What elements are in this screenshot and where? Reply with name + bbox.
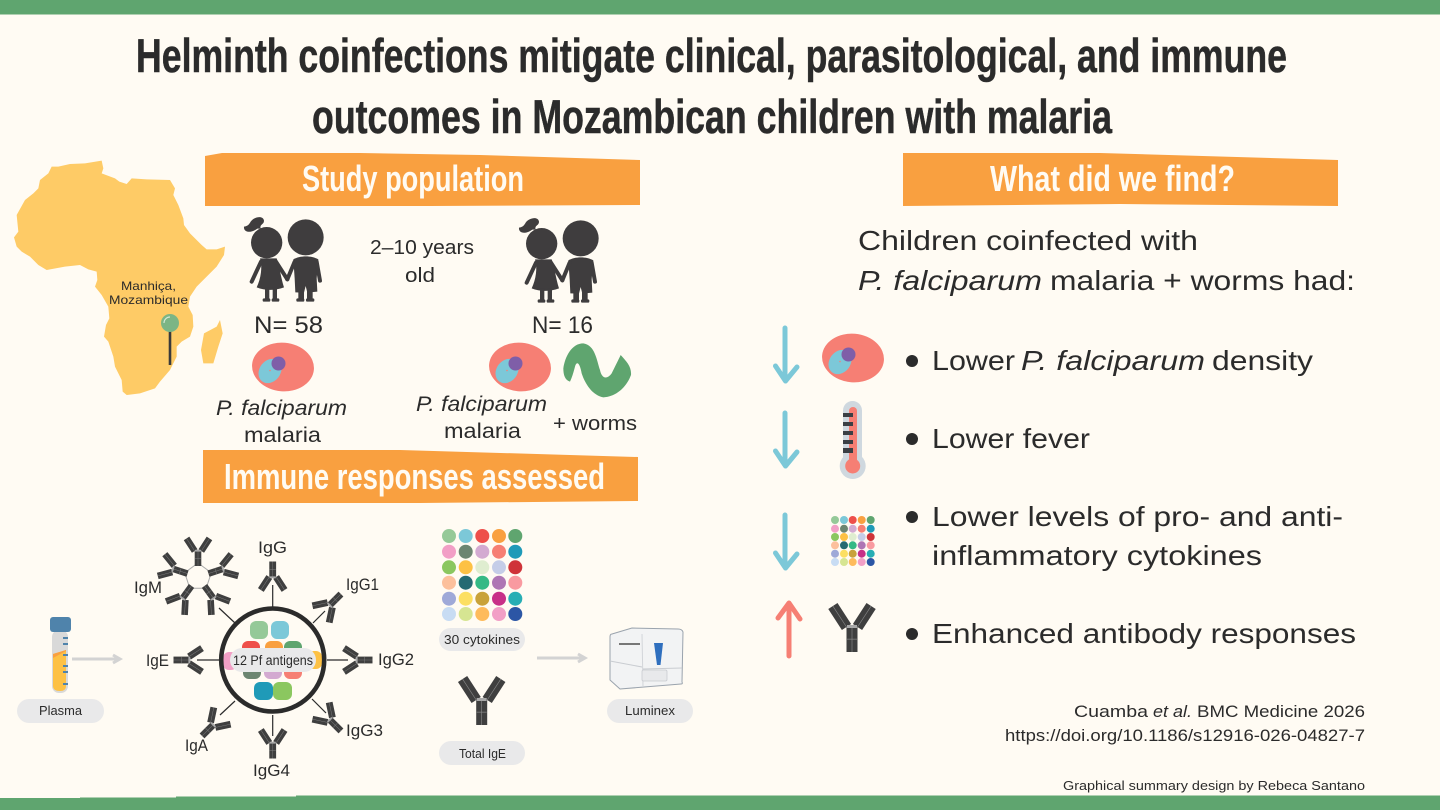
banner: what did we find: What did we find?: [990, 158, 1235, 199]
pill: Luminex: [607, 699, 693, 723]
citation: BMC Medicine 2026: [1197, 702, 1365, 721]
findings intro text: Children coinfected with: [858, 225, 1198, 256]
finding: enhanced antibody responses: Enhanced antibody responses: [932, 618, 1356, 649]
sample size: malaria group: N= 58: [254, 312, 323, 339]
arrow: down: [776, 515, 797, 568]
icon: thermometer: [840, 401, 866, 479]
finding: lower cytokines: inflammatory cytokines: [932, 540, 1262, 571]
banner: study population: Study population: [302, 158, 524, 199]
citation: Cuamba: [1074, 702, 1149, 721]
label: coinfected group: + worms: [553, 413, 637, 435]
icon: Luminex instrument: [610, 628, 683, 689]
design credit: Graphical summary design by Rebeca Santano: [1063, 778, 1365, 793]
title: [136, 29, 1287, 143]
age range text: 2–10 years: [370, 237, 474, 259]
bottom green bar: [0, 796, 1440, 810]
map of Africa with location pin: Manhiça,: [121, 279, 176, 293]
finding: enhanced antibody responses: [778, 603, 1356, 656]
pill: plasma: Plasma: [39, 703, 83, 718]
citation: https://doi.org/10.1186/s12916-026-04827-7: [1005, 726, 1365, 745]
finding: lower parasite density: [776, 328, 1313, 385]
map of Africa with location pin: [14, 161, 225, 395]
findings intro text: malaria + worms had:: [1050, 265, 1355, 296]
isotype labels: IgG2: [378, 650, 414, 669]
icon: infected red cell, group 2: [487, 340, 553, 394]
finding: lower parasite density: Lower: [932, 345, 1015, 376]
findings intro text: [858, 225, 1355, 296]
IgM pentamer: [155, 537, 241, 618]
arrow: down: [776, 413, 797, 466]
pill: plasma: [17, 699, 104, 723]
arrow: down: [776, 328, 797, 381]
sample size: coinfected group: N= 16: [532, 312, 593, 339]
icon: infected red cell, group 1: [250, 340, 316, 394]
isotype labels: IgG3: [346, 721, 383, 740]
finding: lower cytokines: [776, 501, 1343, 571]
findings intro text: P. falciparum: [858, 265, 1042, 296]
finding: lower parasite density: P. falciparum: [1021, 345, 1205, 376]
finding: lower fever: [776, 401, 1090, 479]
antibody isotypes: [174, 562, 372, 758]
isotype labels: IgE: [146, 651, 169, 670]
icon: plasma tube: [50, 617, 71, 693]
citation: [1005, 702, 1365, 745]
pill: total IgE: [439, 741, 525, 765]
isotype labels: [134, 538, 414, 780]
isotype labels: IgG1: [346, 575, 379, 594]
icon: total IgE antibody: [458, 676, 505, 725]
pill: Luminex: Luminex: [625, 703, 676, 718]
label: malaria group: malaria: [244, 424, 321, 447]
arrow: assay to Luminex: [537, 654, 585, 662]
title: outcomes in Mozambican children with malaria: [312, 90, 1113, 143]
cytokine colour grid: [442, 529, 522, 621]
pill: 30 cytokines: 30 cytokines: [444, 632, 521, 647]
icon: antibody: [828, 603, 876, 652]
isotype labels: IgG: [258, 538, 287, 557]
isotype labels: IgG4: [253, 761, 290, 780]
banner: immune responses assessed: [203, 450, 638, 503]
finding: lower cytokines: Lower levels of pro- and anti-: [932, 501, 1343, 532]
isotype labels: IgA: [185, 736, 209, 755]
pill: 12 Pf antigens: 12 Pf antigens: [233, 653, 313, 668]
icon: worm: [563, 343, 631, 397]
icon: children group 2: [519, 218, 599, 303]
label: coinfected group: malaria: [444, 420, 521, 443]
icon: children group 1: [244, 217, 324, 302]
age range text: [370, 237, 474, 287]
antigen blobs: [223, 621, 322, 700]
pill: total IgE: Total IgE: [459, 746, 506, 761]
banner: study population: [205, 153, 640, 206]
icon: infected red cell: [820, 331, 886, 385]
banner: what did we find: [903, 153, 1338, 206]
label: malaria group: [216, 397, 347, 447]
label: coinfected group: P. falciparum: [416, 393, 547, 416]
top green bar: [0, 0, 1440, 14]
icon: small cytokine grid: [831, 516, 875, 566]
finding: lower parasite density: density: [1212, 345, 1313, 376]
label: malaria group: P. falciparum: [216, 397, 347, 420]
citation: et al.: [1153, 702, 1192, 721]
arrow: up: [778, 603, 800, 656]
diagram: antigen bead with antibody isotypes: [134, 537, 414, 780]
finding: lower fever: Lower fever: [932, 423, 1090, 454]
label: coinfected group: [416, 393, 637, 443]
pill: 12 Pf antigens: [230, 648, 316, 672]
arrow: plasma to assay: [72, 655, 120, 663]
isotype labels: IgM: [134, 578, 162, 597]
map of Africa with location pin: Mozambique: [109, 293, 188, 307]
pill: 30 cytokines: [439, 628, 525, 651]
age range text: old: [405, 265, 435, 287]
banner: immune responses assessed: Immune responses assessed: [224, 456, 605, 497]
